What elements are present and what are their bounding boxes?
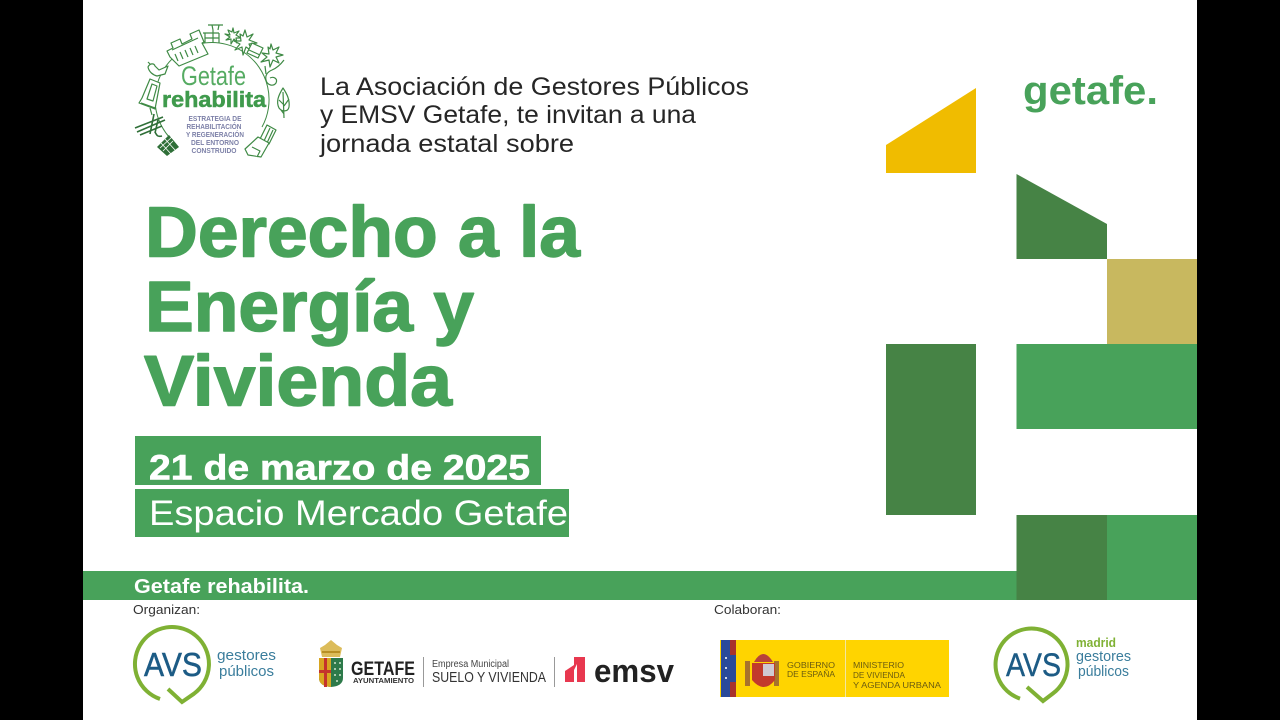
getafe wordmark: getafe. — [1023, 69, 1158, 113]
logo: Getafe Ayuntamiento, EMSV: AYUNTAMIENTO — [353, 676, 414, 685]
logo: Getafe Ayuntamiento, EMSV: SUELO Y VIVIENDA — [432, 669, 546, 686]
crest — [319, 658, 343, 687]
title — [144, 194, 581, 422]
logo caption: REHABILITACIÓN — [186, 122, 242, 131]
flowers — [225, 28, 241, 44]
logo: Gobierno de España: DE ESPAÑA — [787, 669, 835, 679]
logo: Gobierno de España: DE VIVIENDA — [853, 670, 905, 680]
logo: Getafe Ayuntamiento, EMSV: emsv — [594, 653, 674, 689]
open book — [139, 79, 160, 109]
organizers label: Organizan: — [133, 602, 200, 617]
date label — [135, 436, 541, 488]
logo caption: ESTRATEGIA DE — [188, 116, 242, 123]
logo: Gobierno de España: GOBIERNO — [787, 660, 835, 670]
collaborators label: Colaboran: — [714, 602, 781, 617]
solar panel — [157, 135, 179, 156]
logo: AVS madrid gestores públicos: madrid — [1076, 636, 1116, 650]
tree — [278, 88, 289, 118]
logo: AVS gestores públicos — [135, 627, 276, 702]
logo caption: DEL ENTORNO — [191, 140, 240, 147]
logo word: Getafe: Getafe — [181, 61, 246, 91]
title: Derecho a la — [145, 194, 581, 272]
intro text — [319, 73, 749, 158]
tower — [203, 25, 223, 43]
logo: Getafe Ayuntamiento, EMSV — [319, 640, 674, 689]
date label: 21 de marzo de 2025 — [149, 448, 530, 488]
garden box — [247, 43, 263, 58]
title: Vivienda — [144, 342, 453, 422]
logo caption — [186, 116, 244, 155]
logo: Gobierno de España: Y AGENDA URBANA — [853, 680, 941, 690]
lower right boxes — [260, 125, 276, 144]
footer band — [83, 515, 1107, 600]
logo: AVS madrid gestores públicos: gestores — [1076, 648, 1131, 665]
logo: Gobierno de España — [720, 640, 949, 697]
logo: AVS gestores públicos: AVS — [144, 646, 202, 683]
logo: AVS madrid gestores públicos: públicos — [1078, 663, 1129, 680]
logo: AVS gestores públicos: públicos — [219, 663, 274, 680]
logo: Getafe Ayuntamiento, EMSV: GETAFE — [351, 659, 415, 680]
logo caption: CONSTRUIDO — [192, 148, 237, 155]
statue — [148, 64, 168, 76]
pipes — [135, 114, 165, 136]
intro text: jornada estatal sobre — [319, 130, 574, 158]
logo: Gobierno de España: MINISTERIO — [853, 660, 904, 670]
intro text: La Asociación de Gestores Públicos — [320, 73, 749, 101]
venue label: Espacio Mercado Getafe — [149, 494, 568, 533]
logo: AVS gestores públicos: gestores — [217, 647, 276, 664]
logo word: rehabilita: rehabilita — [162, 87, 267, 112]
curl — [266, 60, 284, 85]
decorative building blocks — [886, 88, 1197, 600]
footer band: Getafe rehabilita. — [134, 576, 309, 598]
title: Energía y — [145, 268, 475, 347]
palace — [167, 30, 208, 66]
logo: Getafe Ayuntamiento, EMSV: Empresa Municipal — [432, 659, 509, 670]
logo caption: Y REGENERACIÓN — [186, 130, 244, 139]
logo: Getafe rehabilita — [135, 25, 289, 157]
intro text: y EMSV Getafe, te invitan a una — [320, 101, 696, 129]
logo: AVS madrid gestores públicos: AVS — [1006, 647, 1061, 683]
logo: AVS madrid gestores públicos — [996, 628, 1131, 701]
